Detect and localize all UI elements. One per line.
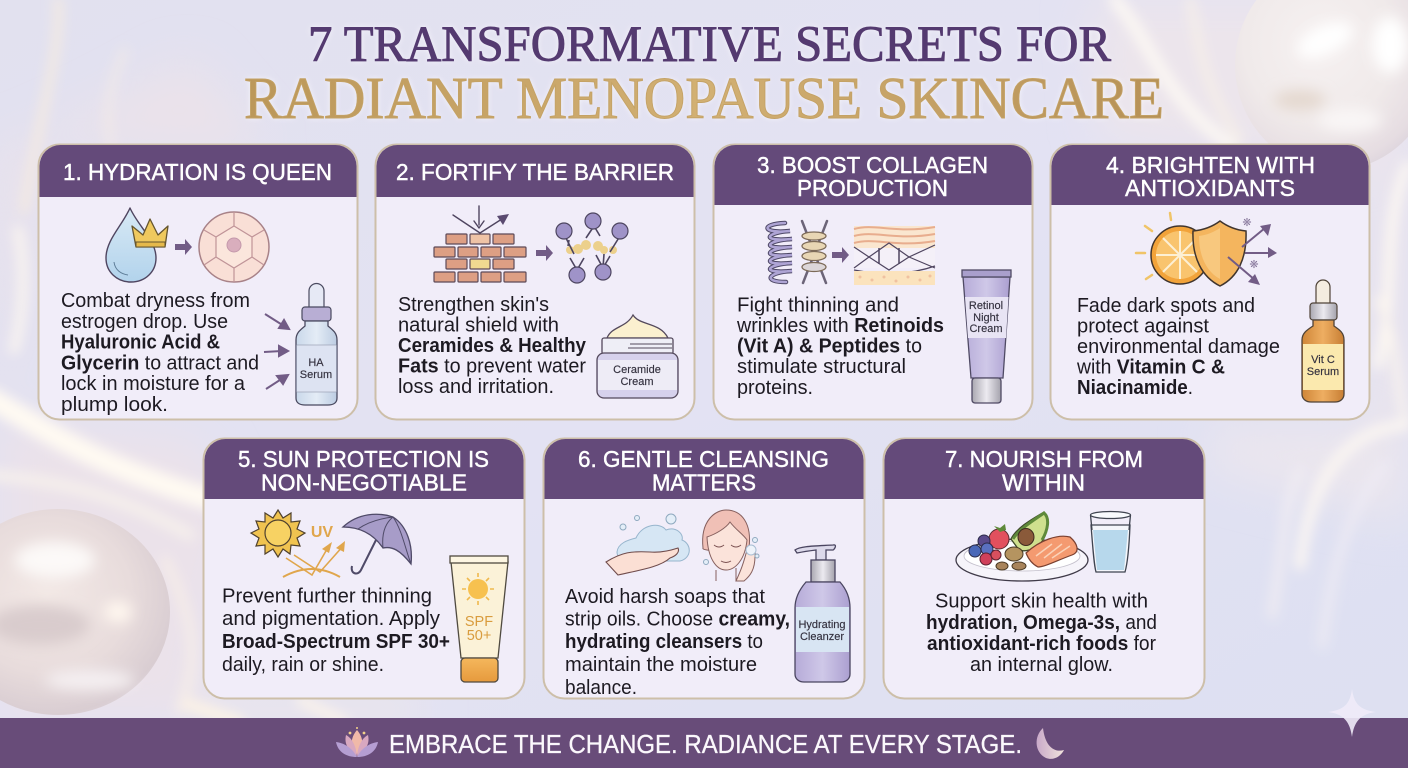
- icon: sun and UV rays: [251, 510, 345, 577]
- icon: vitamin C serum bottle: [1302, 280, 1344, 402]
- body text 5: Broad-Spectrum SPF 30+: [222, 631, 450, 653]
- icon: shield with deflection arrows: ❋: [1249, 259, 1259, 271]
- icon: SPF 50+ sunscreen tube: 50+: [467, 628, 491, 644]
- icon: ceramide cream jar: Cream: [620, 376, 654, 388]
- icon: lotus: [336, 727, 378, 757]
- body text 7: antioxidant-rich foods for: [927, 633, 1156, 655]
- arrow: [175, 239, 192, 255]
- title: [244, 17, 1164, 131]
- pearl top right: [1235, 0, 1408, 170]
- heading 6: MATTERS: [652, 470, 756, 496]
- icon: vitamin C serum bottle: Serum: [1307, 366, 1339, 378]
- icon: sun and UV rays: UV: [311, 524, 333, 541]
- body text 7: hydration, Omega-3s, and: [926, 612, 1157, 634]
- body text 3: wrinkles with Retinoids: [736, 315, 944, 337]
- title: RADIANT MENOPAUSE SKINCARE: [244, 65, 1164, 131]
- icon: face washing: [703, 510, 759, 581]
- heading 5: [238, 446, 489, 496]
- arrows pointing to serum: [264, 314, 289, 389]
- body text 1: Combat dryness from: [61, 290, 250, 312]
- icon: orange slice: [1136, 213, 1209, 284]
- heading 5: 5. SUN PROTECTION IS: [238, 446, 489, 472]
- icon: HA serum bottle: Serum: [300, 369, 332, 381]
- icon: SPF 50+ sunscreen tube: [450, 556, 508, 682]
- icon: shield with deflection arrows: ❋: [1242, 217, 1252, 229]
- panel: 4 brighten with antioxidants: [1050, 144, 1370, 420]
- heading 5: NON-NEGOTIABLE: [261, 470, 467, 496]
- icon: umbrella: [343, 514, 411, 573]
- body text 1: plump look.: [61, 394, 168, 416]
- icon: lipid molecules: [556, 213, 628, 283]
- body text 6: balance.: [565, 677, 637, 699]
- icon: crescent moon: [1037, 728, 1064, 759]
- heading 3: 3. BOOST COLLAGEN: [757, 152, 988, 178]
- heading 1: 1. HYDRATION IS QUEEN: [63, 159, 332, 185]
- body text 5: and pigmentation. Apply: [222, 608, 440, 630]
- icon: HA serum bottle: HA: [308, 357, 324, 369]
- icon: glass of water: [1090, 512, 1130, 572]
- body text 6: hydrating cleansers to: [565, 631, 763, 653]
- body text 2: natural shield with: [398, 314, 559, 336]
- body text 6: strip oils. Choose creamy,: [565, 608, 790, 630]
- icon: retinol night cream tube: Retinol: [969, 300, 1003, 312]
- icon: hand with foam: [606, 514, 689, 575]
- body text 4: protect against: [1077, 316, 1209, 338]
- icon: hydrating cleanser pump bottle: Cleanzer: [800, 631, 844, 643]
- body text 2: Ceramides & Healthy: [398, 335, 587, 357]
- panel: 2 fortify the barrier: [376, 144, 694, 420]
- body text 6: [565, 586, 790, 699]
- icon: retinol night cream tube: Night: [973, 312, 999, 324]
- icon: ceramide cream jar: [597, 315, 678, 398]
- heading 7: [945, 446, 1143, 496]
- title: 7 TRANSFORMATIVE SECRETS FOR: [308, 17, 1111, 73]
- body text 1: Hyaluronic Acid &: [61, 332, 220, 354]
- body text 3: [736, 294, 944, 399]
- body text 3: proteins.: [737, 377, 813, 399]
- body text 5: daily, rain or shine.: [222, 654, 384, 676]
- icon: hydrating cleanser pump bottle: Hydrating: [798, 619, 846, 631]
- body text 2: Fats to prevent water: [398, 356, 586, 378]
- panel: 5 sun protection: [204, 438, 524, 698]
- icon: retinol night cream tube: [962, 270, 1011, 403]
- title: 7 TRANSFORMATIVE SECRETS FOR: [308, 17, 1111, 73]
- body text 2: loss and irritation.: [398, 376, 554, 398]
- body text 7: Support skin health with: [935, 590, 1148, 612]
- body text 6: Avoid harsh soaps that: [565, 586, 765, 608]
- body text 3: (Vit A) & Peptides to: [737, 336, 922, 358]
- heading 4: [1106, 152, 1315, 201]
- heading 4: ANTIOXIDANTS: [1125, 175, 1295, 201]
- icon: sparkle: [1328, 689, 1376, 737]
- panel: 6 gentle cleansing: [544, 438, 864, 699]
- body text 4: environmental damage: [1077, 336, 1280, 358]
- pearl bottom left: [0, 509, 170, 715]
- arrow: [832, 247, 849, 263]
- heading 7: WITHIN: [1002, 470, 1085, 496]
- body text 7: [926, 590, 1157, 676]
- icon: skin layers: [854, 226, 935, 285]
- body text 1: [61, 290, 259, 416]
- icon: ceramide cream jar: Ceramide: [613, 364, 661, 376]
- body text 4: Niacinamide.: [1077, 377, 1193, 399]
- heading 2: 2. FORTIFY THE BARRIER: [396, 159, 674, 185]
- icon: retinol night cream tube: Cream: [969, 323, 1003, 335]
- body text 1: Glycerin to attract and: [61, 352, 259, 374]
- icon: hydrating cleanser pump bottle: [795, 545, 850, 682]
- panel: 1 hydration is queen: [38, 144, 358, 420]
- body text 2: [398, 294, 587, 398]
- body text 6: maintain the moisture: [565, 654, 757, 676]
- body text 1: estrogen drop. Use: [61, 311, 228, 333]
- heading 6: [578, 446, 829, 496]
- icon: HA serum bottle: [296, 284, 337, 405]
- arrow: [536, 245, 553, 261]
- body text 2: Strengthen skin's: [398, 294, 549, 316]
- body text 5: Prevent further thinning: [222, 586, 432, 608]
- panel: 3 boost collagen production: [714, 144, 1032, 420]
- icon: vitamin C serum bottle: Vit C: [1311, 354, 1335, 366]
- title: RADIANT MENOPAUSE SKINCARE: [244, 65, 1164, 131]
- body text 1: lock in moisture for a: [61, 373, 246, 395]
- body text 4: [1076, 295, 1280, 399]
- heading 4: 4. BRIGHTEN WITH: [1106, 152, 1315, 178]
- body text 4: with Vitamin C &: [1076, 356, 1225, 378]
- panel: 7 nourish from within: [884, 438, 1204, 698]
- icon: water drop with crown: [106, 208, 168, 282]
- footer banner: [0, 718, 1408, 768]
- footer tagline: EMBRACE THE CHANGE. RADIANCE AT EVERY STAGE.: [389, 729, 1022, 759]
- heading 3: PRODUCTION: [797, 175, 948, 201]
- body text 4: Fade dark spots and: [1077, 295, 1255, 317]
- icon: SPF 50+ sunscreen tube: SPF: [465, 614, 493, 630]
- heading 7: 7. NOURISH FROM: [945, 446, 1143, 472]
- icon: brick wall barrier: [434, 206, 526, 282]
- body text 3: stimulate structural: [737, 356, 906, 378]
- body text 7: an internal glow.: [970, 654, 1113, 676]
- icon: plate of healthy food: [956, 512, 1088, 581]
- heading 6: 6. GENTLE CLEANSING: [578, 446, 829, 472]
- body text 3: Fight thinning and: [737, 294, 899, 316]
- icon: collagen coil: [768, 221, 827, 283]
- icon: skin cell: [199, 212, 269, 282]
- icon: shield with deflection arrows: [1193, 217, 1277, 286]
- body text 5: [222, 586, 450, 676]
- heading 3: [757, 152, 988, 201]
